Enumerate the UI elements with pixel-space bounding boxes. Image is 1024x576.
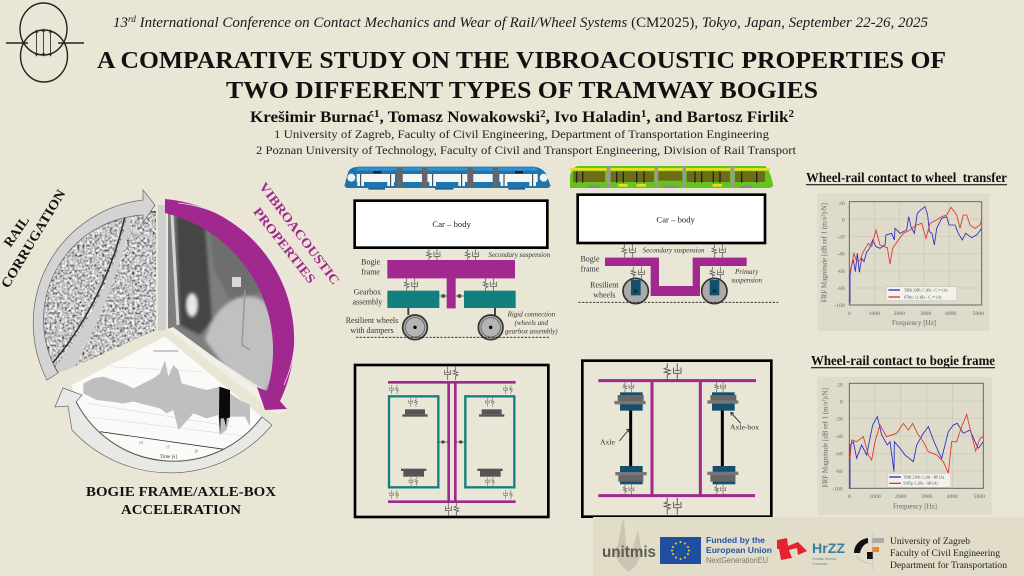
y axis title: FRF Magnitude [dB ref 1 (m/s²)/N] [821,388,829,487]
bogie frame [580,254,747,296]
x axis labels: 3000 [920,311,931,317]
x axis labels: 3000 [921,494,932,500]
secondary suspension: Secondary suspension [643,247,705,255]
y axis labels [832,382,843,492]
y axis labels: -60 [837,269,845,275]
axle label [600,429,629,446]
secondary suspension [622,244,725,258]
icon: green tram [570,166,773,188]
rigid connection note: gearbox assembly) [505,328,558,336]
y axis labels: 20 [837,382,843,388]
y axis labels: 0 [842,218,845,224]
logo: faculty of civil engineering [854,533,884,570]
y axis labels: -100 [832,486,843,492]
authors: , Ivo Haladin [546,109,641,126]
teal gearboxes [389,396,514,487]
photo: measurement on wheel [168,214,273,391]
heading: chart 1: Wheel-rail contact to wheel transfer [806,170,1007,185]
spring dampers [390,367,513,516]
x axis labels: 2000 [894,311,905,317]
x axis labels: 1000 [869,311,880,317]
legend: S70(n. f.), (B) – C₁ᵂᴱ (A) [904,296,942,301]
photo: rail corrugation [44,212,156,372]
authors: , and Bartosz Firlik [646,109,789,126]
label: properties: PROPERTIES [250,204,319,286]
label: bogie frame acceleration: ACCELERATION [121,503,241,518]
logo: funded by EU: Funded by the [706,535,765,545]
gearbox assembly: Gearbox [354,288,381,297]
y axis labels: 0 [840,400,843,406]
primary suspension: Primary [734,268,759,276]
heading: chart 2: Wheel-rail contact to bogie frame [811,353,995,368]
purple frame [598,381,756,496]
footer logo band [593,517,1024,576]
x axis labels: 5000 [974,494,985,500]
resilient wheels [590,278,727,304]
affiliations [256,127,797,157]
legend: S105p, C₁(B) – AB (A) [903,482,938,487]
car body: Car – body [656,215,696,225]
y axis labels: -20 [837,235,845,241]
rigid connection note: Rigid connection [507,310,556,318]
conference line: rd [128,14,136,24]
axles [631,410,722,467]
label: vibroacoustic: VIBROACOUSTIC [256,179,343,287]
authors: Krešimir Burnać [250,109,363,126]
label: bogie frame acceleration [86,485,276,518]
resilient wheels: with dampers [350,326,394,335]
logo: hrzz: Foundation [812,562,828,566]
logo: unitmis [602,520,656,572]
axle boxes [614,392,738,484]
label: bogie frame acceleration: BOGIE FRAME/AXLE-BOX [86,485,276,500]
x axis labels: 5000 [973,311,984,317]
x axis title: Frequency [Hz] [892,319,936,327]
y axis labels: -80 [837,286,845,292]
plot: acceleration signal [72,337,262,460]
logo: contact mechanics [6,3,84,82]
connectors [438,440,465,444]
diagram: bogie plan view B [582,361,771,517]
primary suspension [631,267,763,285]
title: TWO DIFFERENT TYPES OF TRAMWAY BOGIES [226,77,818,104]
plot: acceleration signal: 20 [194,450,198,454]
y axis labels: -40 [837,252,845,258]
y axis labels: 20 [839,201,845,207]
secondary suspension [427,248,551,262]
purple frame [388,382,516,502]
secondary suspension: Secondary suspension [488,251,551,259]
primary suspension springs [404,278,497,292]
arrow: purple vibroacoustic [165,199,295,410]
rigid connection note [505,310,558,336]
affiliations: 1 University of Zagreb, Faculty of Civil Engineering, Department of Transportation Engineering [274,127,769,141]
logo: unitmis: unitmis [602,544,656,561]
x axis labels: 1000 [869,494,881,500]
chart 2 [817,377,992,515]
axle boxes [401,409,504,477]
label: rail: RAIL [0,213,32,250]
logo: hrzz [777,538,845,566]
y axis labels: -80 [835,469,843,475]
x axis labels [848,311,984,317]
affiliations: 2 Poznan University of Technology, Faculty of Civil and Transport Engineering, Division of Rail Transport [256,143,797,157]
title: A COMPARATIVE STUDY ON THE VIBROACOUSTIC PROPERTIES OF [97,47,946,74]
black arc of plot [76,402,262,461]
bogie frame: Bogie [361,258,381,267]
axle label: Axle [600,437,615,446]
x axis labels: 4000 [947,494,958,500]
rigid connection note: (wheels and [515,319,549,327]
logo: funded by EU: European Union [706,545,772,555]
plot: acceleration signal: Time [s] [160,455,177,460]
plot: acceleration signal: 15 [166,445,170,449]
resilient wheels [346,308,503,340]
bogie frame: frame [361,268,380,277]
car body [355,201,547,248]
resilient wheels: Resilient [590,281,619,290]
x axis labels: 4000 [945,311,956,317]
x axis labels: 0 [848,494,851,500]
y axis title: FRF Magnitude [dB ref 1 (m/s²)/N] [821,203,829,302]
logo: hrzz: Croatian Science [812,557,837,561]
logo: funded by EU [660,535,772,565]
black arc of rail photo [42,212,156,373]
x axis labels [848,494,985,500]
legend [887,473,951,487]
car body: Car – body [432,219,472,229]
bogie frame: frame [581,265,600,274]
resilient wheels: Resilient wheels [346,316,398,325]
title [97,47,946,104]
axle-box label [730,412,759,432]
band between photo and plot [168,327,286,415]
car body [578,195,765,243]
authors: 1 [641,109,646,120]
conference line: (CM2025), Tokyo, Japan, September 22-26, 2025 [631,15,921,31]
y axis labels: -100 [834,303,845,309]
x axis labels: 0 [848,311,851,317]
y axis labels: -60 [835,451,843,457]
gearbox assembly [352,288,516,308]
icon: blue tram [344,167,551,190]
bogie frame: Bogie [580,254,600,263]
university text: Faculty of Civil Engineering [890,548,1000,559]
authors: 1 [374,109,379,120]
resilient wheels: wheels [593,291,615,300]
university text: University of Zagreb [890,536,970,547]
arrow: light bottom [55,388,272,473]
legend: TMK 2300, C₁(B) – C₁ᵂᴱ (A) [904,289,948,294]
diagram: bogie side view B [578,195,778,304]
cycle diagram [0,179,343,518]
logo: funded by EU: NextGenerationEU [706,555,768,565]
band between rail and photo [158,205,166,331]
spring dampers [623,363,725,514]
axle-box label: Axle-box [730,423,759,432]
university text [890,536,1007,571]
arrow: gray rail [33,190,155,380]
y axis labels [834,201,845,309]
authors: , Tomasz Nowakowski [379,109,541,126]
chart 1 [817,193,989,331]
legend: TMK 2300, C₁(B) – BF (A) [903,475,945,480]
diagram: bogie plan view A [355,365,548,517]
legend [886,287,957,301]
bogie frame [361,258,515,308]
authors: 2 [788,109,794,120]
y axis labels: -40 [835,434,843,440]
primary suspension: suspension [731,277,763,285]
plot: acceleration signal: 10 [139,441,143,445]
authors: 2 [540,109,546,120]
conference line: International Conference on Contact Mechanics and Wear of Rail/Wheel Systems [136,15,631,31]
y axis labels: -20 [835,416,843,422]
university text: Department for Transportation [890,560,1007,571]
gearbox assembly: assembly [352,298,382,307]
x axis title: Frequency [Hz] [893,502,937,510]
conference line: 13 [113,15,128,31]
x axis labels: 2000 [895,494,906,500]
diagram: bogie side view A [346,201,558,340]
logo: hrzz: HrZZ [812,540,845,556]
